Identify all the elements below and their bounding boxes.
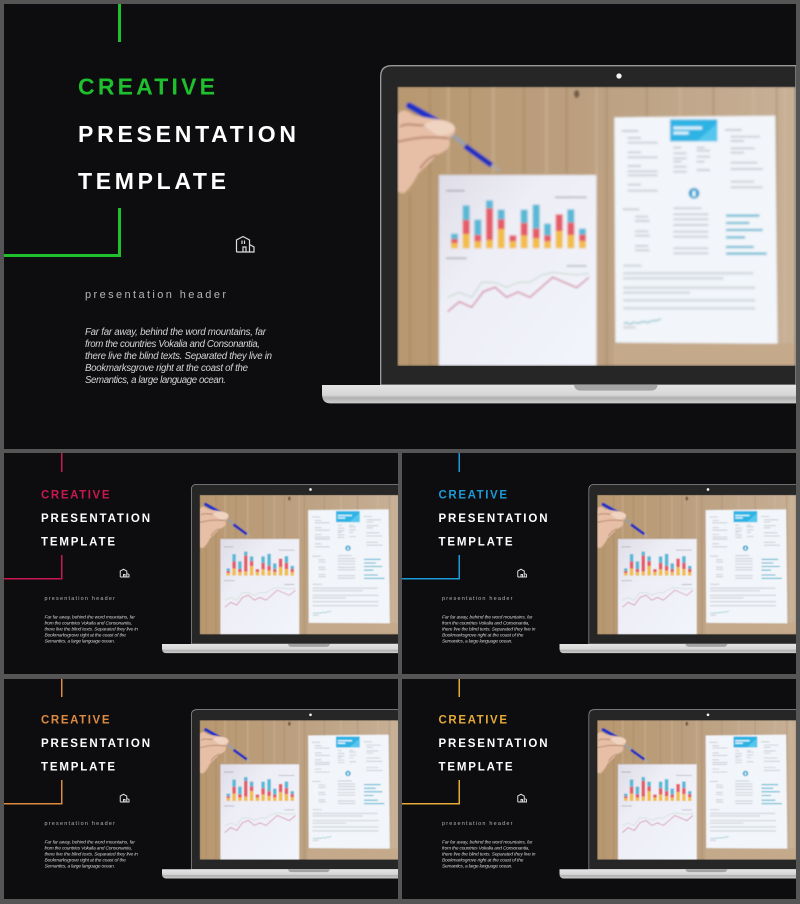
title: TEMPLATE [438,536,513,548]
title: PRESENTATION [41,513,150,525]
body text: from the countries Vokalia and Consonantia, [44,846,132,852]
title: PRESENTATION [438,738,548,750]
body text: Far far away, behind the word mountains, far [44,840,135,846]
body text: there live the blind texts. Separated they live in [442,852,536,858]
title: PRESENTATION [41,738,150,750]
laptop mockup [162,710,399,878]
title [41,714,150,774]
body text: Bookmarksgrove right at the coast of the [44,858,126,864]
body text: Far far away, behind the word mountains, far [44,614,135,620]
laptop mockup [560,484,796,653]
body text: Far far away, behind the word mountains, far [442,840,533,846]
title: PRESENTATION [438,513,548,525]
title: CREATIVE [41,714,110,726]
subheading: presentation header [442,821,513,827]
slide contents [402,678,548,870]
body text: Semantics, a large language ocean. [44,638,115,644]
panel: small slide pink [4,453,399,674]
title: TEMPLATE [78,168,226,194]
body text [442,840,536,870]
body text: Semantics, a large language ocean. [85,375,226,386]
slide contents [402,453,548,644]
laptop mockup [162,484,399,653]
accent bracket: green [4,4,120,256]
subheading: presentation header [44,596,115,602]
title: CREATIVE [41,489,110,501]
body text: Semantics, a large language ocean. [442,864,512,870]
panel: small slide orange [4,678,399,899]
title [41,489,150,548]
body text: there live the blind texts. Separated they live in [44,626,138,632]
slide contents [4,453,150,644]
icon: building [518,569,526,577]
accent bracket: pink [4,453,62,579]
body text [44,614,138,644]
title: CREATIVE [438,714,507,726]
body text: Bookmarksgrove right at the coast of the [85,363,249,374]
body text: Bookmarksgrove right at the coast of the [44,632,126,638]
accent bracket: orange [4,678,62,804]
accent bracket: yellow [402,678,459,804]
title [438,489,548,548]
subheading: presentation header [44,821,115,827]
panel: small slide blue [402,453,796,674]
body text: there live the blind texts. Separated they live in [44,852,138,858]
body text: Bookmarksgrove right at the coast of the [442,632,524,638]
icon: building [120,794,129,802]
body text [442,614,536,644]
body text: Semantics, a large language ocean. [44,864,115,870]
body text: from the countries Vokalia and Consonantia, [44,620,132,626]
laptop mockup [322,66,796,403]
body text [44,840,138,870]
title: PRESENTATION [78,121,296,147]
body text: Semantics, a large language ocean. [442,638,512,644]
title [438,714,548,774]
body text: Far far away, behind the word mountains, far [442,614,533,620]
body text: there live the blind texts. Separated they live in [442,626,536,632]
title: CREATIVE [78,74,215,100]
title [78,74,296,194]
accent bracket: blue [402,453,459,579]
body text: from the countries Vokalia and Consonantia, [442,846,530,852]
title: TEMPLATE [41,762,115,774]
slide contents [4,678,150,870]
panel: small slide yellow [402,678,796,899]
body text: from the countries Vokalia and Consonantia, [442,620,530,626]
title: TEMPLATE [41,536,115,548]
body text [85,327,272,386]
body text: Bookmarksgrove right at the coast of the [442,858,524,864]
icon: building [518,794,526,802]
icon: building [236,236,254,252]
body text: from the countries Vokalia and Consonantia, [85,339,260,350]
title: TEMPLATE [438,762,513,774]
body text: Far far away, behind the word mountains, far [85,327,267,338]
panel: main slide green [4,4,796,449]
subheading: presentation header [85,289,226,301]
laptop mockup [560,710,796,878]
icon: building [120,569,129,577]
body text: there live the blind texts. Separated they live in [85,351,272,362]
subheading: presentation header [442,596,513,602]
title: CREATIVE [438,489,507,501]
